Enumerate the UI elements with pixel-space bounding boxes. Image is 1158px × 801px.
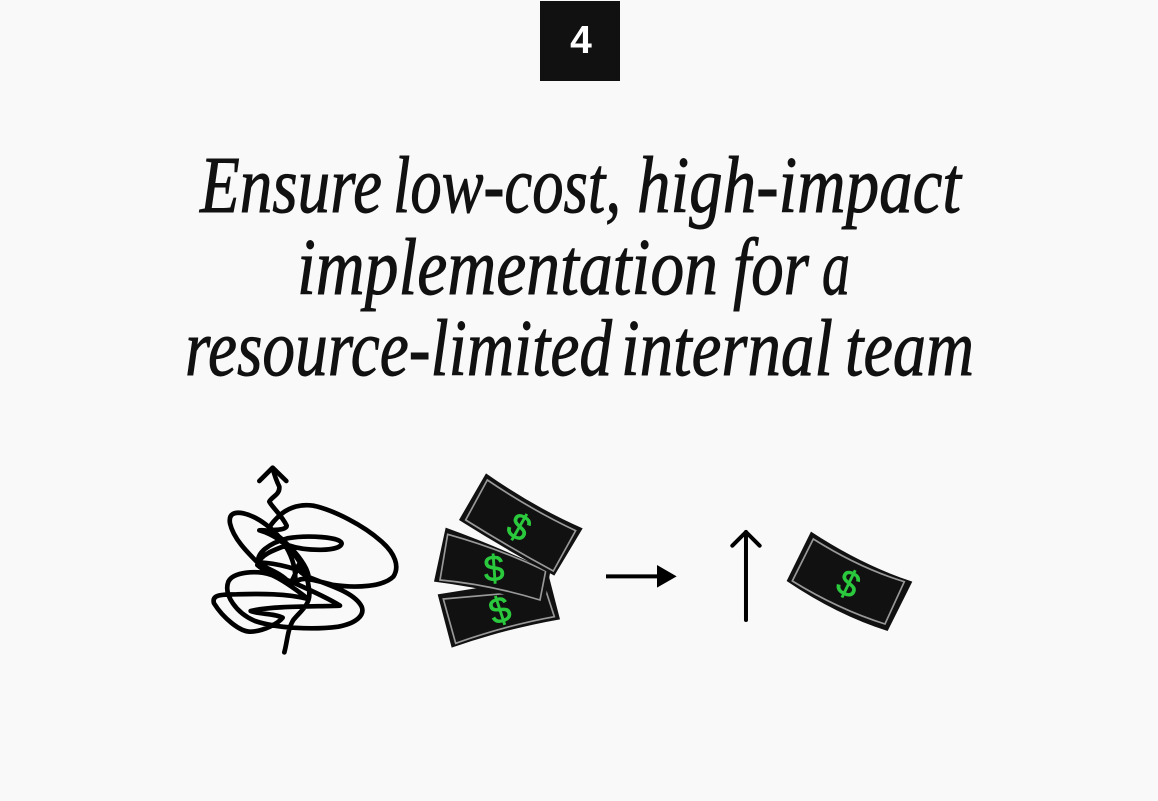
title: internal (621, 303, 833, 393)
top bill (459, 473, 583, 576)
title: resource-limited (185, 303, 612, 393)
number badge (540, 1, 620, 81)
title: high-impact (637, 140, 963, 230)
bottom bill: $ (484, 588, 516, 633)
number badge: 4 (570, 19, 592, 62)
middle bill: $ (482, 547, 506, 590)
middle bill (434, 528, 550, 605)
title: for (733, 222, 809, 312)
title: team (845, 303, 974, 393)
title: low-cost, (393, 140, 621, 230)
title: Ensure (199, 140, 382, 230)
arrow: up (732, 532, 760, 620)
title: a (822, 222, 850, 312)
arrow: right (606, 565, 677, 588)
top bill: $ (500, 504, 538, 550)
icon: single dollar bill (787, 532, 912, 631)
icon: single dollar bill: $ (830, 561, 867, 606)
bottom bill (438, 577, 560, 648)
icon: tangled scribble with arrow (214, 468, 396, 652)
title: implementation (297, 222, 718, 312)
title (185, 140, 974, 393)
icon: stack of three dollar bills (434, 473, 583, 648)
